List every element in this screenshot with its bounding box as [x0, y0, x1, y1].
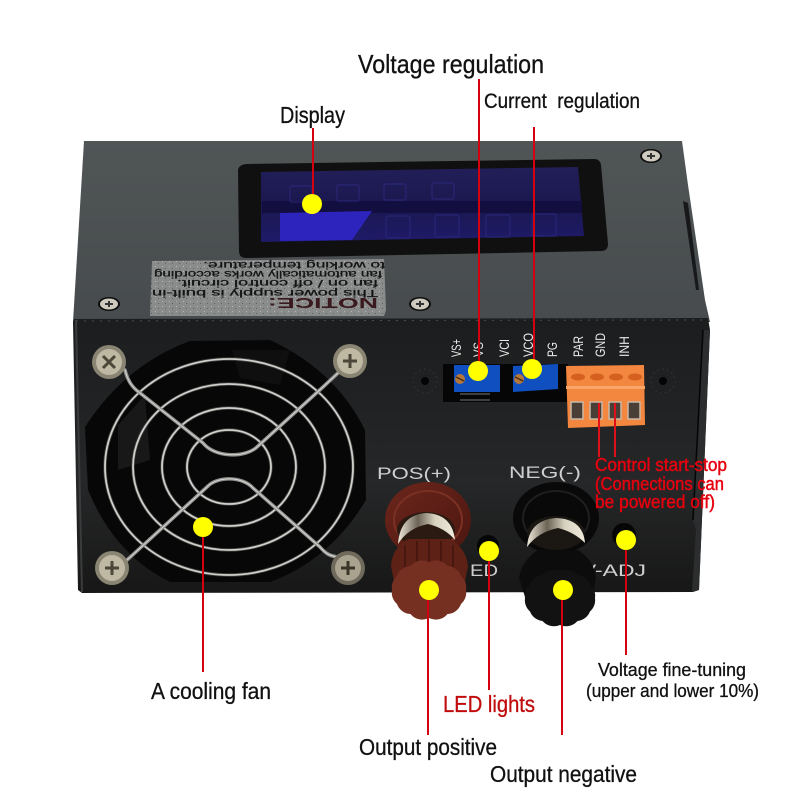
callout: current regulation [484, 90, 640, 379]
current potentiometer [513, 364, 558, 392]
control pins silk-screen labels: PAR [570, 336, 586, 357]
display module [238, 159, 608, 258]
front panel of the enclosure [73, 318, 710, 593]
control pins silk-screen labels: VS+ [448, 339, 464, 357]
label: voltage fine-tuning: (upper and lower 10%) [586, 681, 759, 701]
callout: display [280, 102, 345, 214]
label: A cooling fan: A cooling fan [151, 678, 271, 704]
label: Output positive: Output positive [359, 734, 497, 760]
top panel of the enclosure [73, 141, 710, 322]
label: voltage fine-tuning [586, 660, 759, 701]
control start-stop text: be powered off) [595, 492, 715, 512]
LED indicator hole [477, 535, 499, 557]
notice sticker (upside down): This power supply is built-in [152, 287, 378, 299]
orange terminal block [566, 365, 645, 428]
heading: Current regulation: Current regulation [484, 90, 640, 113]
control pins silk-screen labels [448, 333, 632, 357]
callout: voltage fine-tuning [586, 530, 759, 701]
cooling fan with wire guard [85, 340, 367, 585]
label: LED lights: LED lights [443, 691, 535, 717]
power supply unit photo [73, 141, 710, 626]
panel labels [377, 463, 646, 580]
control pins silk-screen labels: PG [544, 342, 560, 357]
panel labels: POS(+) [377, 464, 451, 483]
notice sticker (upside down): fan automatically works according [154, 268, 382, 280]
control start-stop text: (Connections can [595, 474, 724, 494]
panel labels: ED [470, 561, 498, 580]
callout: voltage regulation [358, 49, 544, 381]
control pins silk-screen labels: VS [470, 342, 486, 357]
side vent slot [683, 201, 699, 290]
positive output terminal [385, 482, 471, 620]
callout: LED lights [443, 541, 535, 717]
guard rings [105, 359, 353, 575]
fan housing [85, 340, 366, 582]
top panel screws [98, 149, 662, 311]
control pins silk-screen labels: VCO [520, 333, 536, 357]
negative output terminal [513, 482, 599, 626]
guard screws [92, 344, 367, 585]
notice sticker (upside down): NOTICE: [268, 294, 378, 311]
heading: Voltage regulation: Voltage regulation [358, 49, 544, 79]
voltage adjust hole [612, 523, 636, 547]
notice sticker (upside down): fan on / off control circuit. [177, 277, 378, 289]
control pins silk-screen labels: INH [616, 336, 632, 357]
callout: output positive [359, 580, 497, 760]
callout: output negative [490, 580, 637, 787]
label: voltage fine-tuning: Voltage fine-tuning [598, 660, 746, 680]
panel labels: V-ADJ [581, 561, 646, 580]
control board with potentiometers [443, 364, 568, 402]
notice sticker (upside down) [150, 259, 386, 316]
voltage potentiometer [454, 365, 500, 392]
control start-stop text: Control start-stop [595, 455, 727, 475]
control pins silk-screen labels: VCI [496, 339, 512, 357]
control pins silk-screen labels: GND [592, 333, 608, 357]
display bezel [238, 159, 608, 258]
notice sticker (upside down): to working temperature. [203, 259, 385, 271]
control start-stop text [595, 455, 727, 512]
callout: control start-stop [595, 403, 727, 512]
guard cross wires [125, 370, 338, 560]
mounting holes [413, 369, 675, 393]
LCD screen [261, 167, 584, 242]
panel labels: NEG(-) [509, 463, 581, 482]
callout: cooling fan [151, 517, 271, 704]
label: Output negative: Output negative [490, 761, 637, 787]
heading: Display: Display [280, 102, 345, 128]
